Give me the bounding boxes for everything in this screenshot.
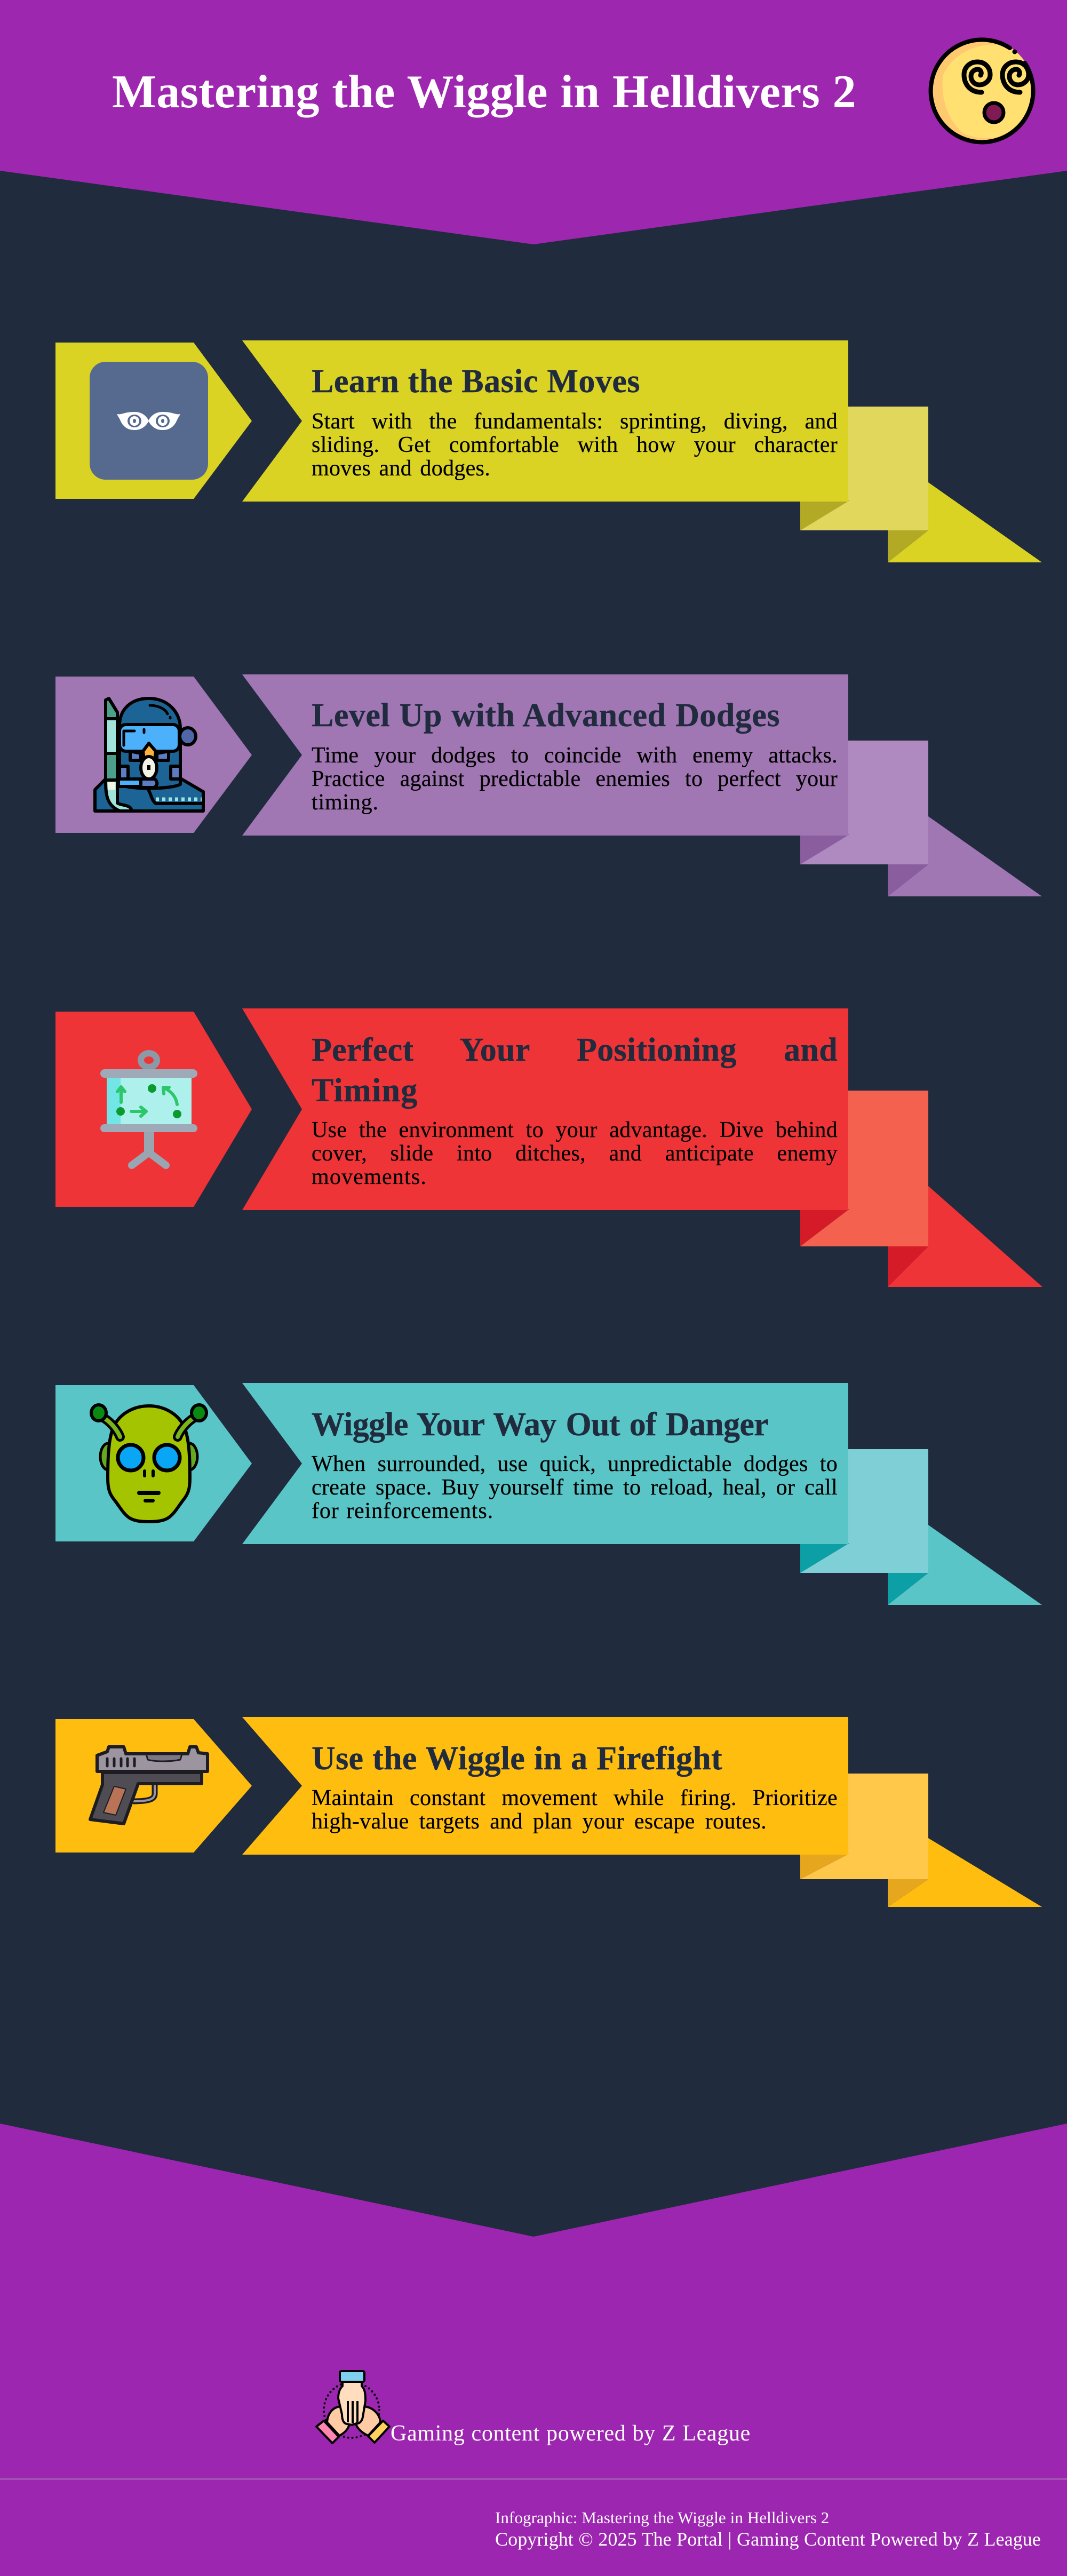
ribbon graphic with icon — [55, 674, 1042, 896]
icon: pistol — [90, 1747, 208, 1824]
heading: Level Up with Advanced Dodges — [312, 697, 780, 734]
footer caption: Infographic: Mastering the Wiggle in Helldivers 2 — [495, 2508, 829, 2527]
credit line: Gaming content powered by Z League — [391, 2421, 751, 2446]
body text: When surrounded, use quick, unpredictable dodges to — [312, 1452, 838, 1476]
body text: Maintain constant movement while firing. Prioritize — [312, 1786, 838, 1810]
heading: Use the Wiggle in a Firefight — [312, 1740, 722, 1777]
panel: step 2 level up with advanced dodges — [55, 674, 1042, 896]
heading: Wiggle Your Way Out of Danger — [312, 1406, 768, 1443]
body text: create space. Buy yourself time to reload, heal, or call — [312, 1475, 838, 1500]
copyright: Copyright © 2025 The Portal | Gaming Content Powered by Z League — [495, 2529, 1041, 2550]
icon: tactics board — [100, 1053, 197, 1165]
icon: joined hands — [315, 2370, 391, 2445]
body text: cover, slide into ditches, and anticipate enemy — [312, 1141, 838, 1166]
heading: Timing — [312, 1072, 418, 1109]
ribbon graphic with icon — [55, 340, 1042, 562]
body text: Use the environment to your advantage. Dive behind — [312, 1118, 838, 1142]
heading: Learn the Basic Moves — [312, 363, 640, 400]
body text: movements. — [312, 1165, 427, 1189]
body text — [312, 409, 838, 481]
body text: for reinforcements. — [312, 1499, 493, 1523]
panel: step 1 learn the basic moves — [55, 340, 1042, 562]
body text: moves and dodges. — [312, 456, 490, 481]
heading — [312, 1032, 838, 1109]
icon: dizzy face — [928, 37, 1036, 144]
heading: Perfect Your Positioning and — [312, 1032, 838, 1068]
ribbon graphic with icon — [55, 1717, 1042, 1907]
body text: high-value targets and plan your escape routes. — [312, 1809, 767, 1834]
panel: step 5 use the wiggle in a firefight — [55, 1717, 1042, 1907]
body text: sliding. Get comfortable with how your character — [312, 433, 838, 457]
body text: Start with the fundamentals: sprinting, diving, and — [312, 409, 838, 434]
icon: diver — [95, 698, 203, 811]
icon: eyes on blue tile — [90, 362, 208, 480]
body text — [312, 743, 838, 815]
ribbon graphic with icon — [55, 1008, 1042, 1287]
body text — [312, 1452, 838, 1523]
body text: Time your dodges to coincide with enemy attacks. — [312, 743, 838, 768]
body text — [312, 1118, 838, 1189]
body text: timing. — [312, 790, 379, 815]
body text: Practice against predictable enemies to perfect your — [312, 767, 838, 791]
footer band — [0, 2124, 1067, 2576]
ribbon graphic with icon — [55, 1383, 1042, 1605]
icon: alien head — [91, 1405, 206, 1522]
title: Mastering the Wiggle in Helldivers 2 — [112, 66, 856, 118]
panel: step 3 perfect your positioning and timing — [55, 1008, 1042, 1287]
panel: step 4 wiggle your way out of danger — [55, 1383, 1042, 1605]
body text — [312, 1786, 838, 1834]
header band — [0, 0, 1067, 244]
